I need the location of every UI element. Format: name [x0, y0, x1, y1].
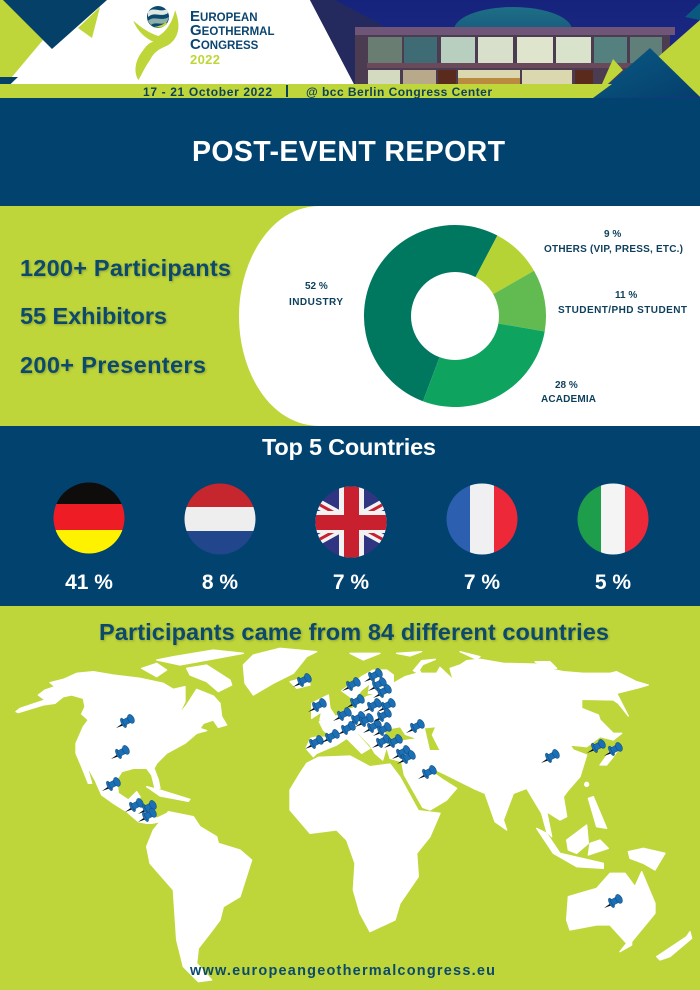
- logo figure: [133, 10, 178, 80]
- country percentages: 41 %: [65, 571, 113, 594]
- donut labels: INDUSTRY: [289, 297, 343, 308]
- flag: Germany: [54, 482, 124, 554]
- flag: France: [446, 484, 518, 554]
- donut labels: 11 %: [615, 290, 637, 301]
- logo wordmark: GEOTHERMAL: [190, 22, 275, 39]
- date and venue strip: @ bcc Berlin Congress Center: [306, 85, 492, 99]
- country percentages: 7 %: [464, 571, 500, 594]
- date and venue strip: [0, 84, 612, 99]
- country percentages: 5 %: [595, 571, 631, 594]
- panel: top 5 countries: [0, 426, 700, 606]
- donut labels: ACADEMIA: [541, 394, 596, 405]
- country percentages: [65, 571, 631, 594]
- headline numbers: 1200+ Participants: [20, 255, 231, 281]
- map heading: Participants came from 84 different countries: [99, 619, 609, 645]
- flag: Italy: [578, 484, 648, 554]
- heading: Top 5 Countries: [262, 434, 436, 460]
- donut chart: [364, 225, 546, 407]
- world map: [16, 648, 692, 982]
- headline numbers: [20, 255, 231, 378]
- panel: world map: [0, 606, 700, 990]
- location pins: [102, 667, 624, 909]
- logo wordmark: 2022: [190, 52, 220, 67]
- donut labels: STUDENT/PHD STUDENT: [558, 305, 687, 316]
- logo globe: [147, 6, 169, 28]
- panel: participation stats: [0, 206, 700, 426]
- flag: Netherlands: [184, 484, 256, 554]
- logo wordmark: CONGRESS: [190, 36, 259, 53]
- donut labels: 9 %: [604, 229, 621, 240]
- date and venue strip: 17 - 21 October 2022: [143, 85, 272, 99]
- donut labels: OTHERS (VIP, PRESS, ETC.): [544, 244, 683, 255]
- website url: www.europeangeothermalcongress.eu: [189, 963, 495, 979]
- venue photo: [310, 0, 700, 98]
- donut labels: [289, 229, 687, 405]
- logo: [133, 6, 275, 80]
- logo wordmark: [190, 8, 275, 67]
- country percentages: 8 %: [202, 571, 238, 594]
- title band: [0, 98, 700, 206]
- donut labels: 28 %: [555, 380, 578, 391]
- flag: United Kingdom: [316, 486, 386, 558]
- title: POST-EVENT REPORT: [192, 136, 506, 168]
- headline numbers: 55 Exhibitors: [20, 303, 167, 329]
- corner shapes left: [0, 0, 107, 94]
- header background: [0, 0, 700, 98]
- headline numbers: 200+ Presenters: [20, 352, 206, 378]
- country percentages: 7 %: [333, 571, 369, 594]
- corner shapes right: [593, 3, 700, 98]
- donut labels: 52 %: [305, 281, 328, 292]
- logo wordmark: EUROPEAN: [190, 8, 258, 25]
